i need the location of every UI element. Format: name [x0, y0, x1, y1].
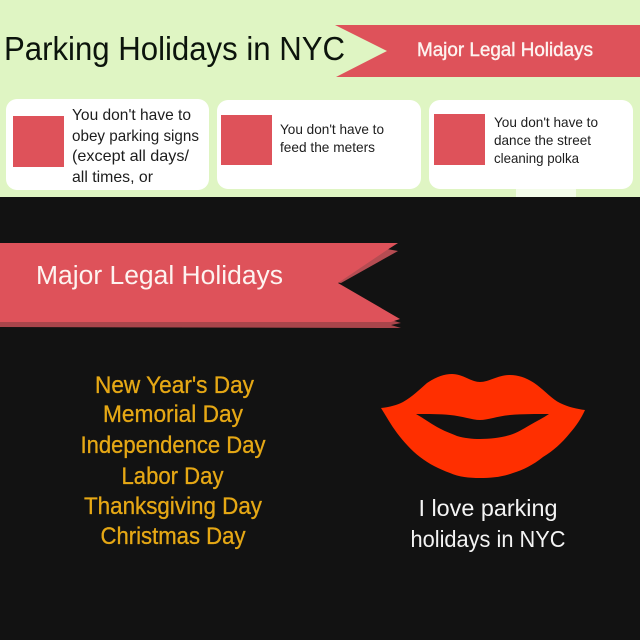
- holiday list: Labor Day: [122, 463, 224, 490]
- text: parking signs: (except all days/: [72, 148, 190, 165]
- panel: meters: [217, 100, 421, 189]
- holiday list: Memorial Day: [103, 401, 243, 428]
- caption: [410, 495, 566, 552]
- section ribbon: [0, 243, 401, 328]
- panel: parking signs: [6, 99, 209, 190]
- text: parking signs: [72, 107, 199, 186]
- text: meters: feed the meters: [280, 139, 375, 155]
- text: meters: [280, 121, 384, 155]
- title: Parking Holidays in NYC: [4, 30, 345, 67]
- holiday list: Independence Day: [80, 432, 266, 459]
- section ribbon: Major Legal Holidays: [36, 262, 283, 290]
- text: street cleaning: [494, 114, 598, 166]
- text: street cleaning: You don't have to: [494, 114, 598, 130]
- top ribbon: [335, 25, 640, 77]
- text: street cleaning: cleaning polka: [494, 150, 579, 166]
- text: parking signs: all times, or: [72, 169, 154, 186]
- icon placeholder: meters: [221, 115, 272, 165]
- text: meters: You don't have to: [280, 121, 384, 137]
- top ribbon: Major Legal Holidays: [417, 40, 593, 61]
- caption: I love parking: [418, 495, 558, 521]
- holiday list: Thanksgiving Day: [84, 493, 262, 520]
- caption: holidays in NYC: [410, 526, 566, 552]
- holiday list: [80, 372, 266, 550]
- text: parking signs: You don't have to: [72, 107, 191, 124]
- text: parking signs: obey parking signs: [72, 128, 199, 145]
- icon placeholder: street cleaning: [434, 114, 485, 165]
- panel: street cleaning: [429, 100, 633, 189]
- holiday list: Christmas Day: [100, 523, 246, 550]
- icon placeholder: parking signs: [13, 116, 64, 167]
- icon: red lips: [381, 374, 585, 478]
- holiday list: New Year's Day: [95, 372, 254, 399]
- text: street cleaning: dance the street: [494, 132, 591, 148]
